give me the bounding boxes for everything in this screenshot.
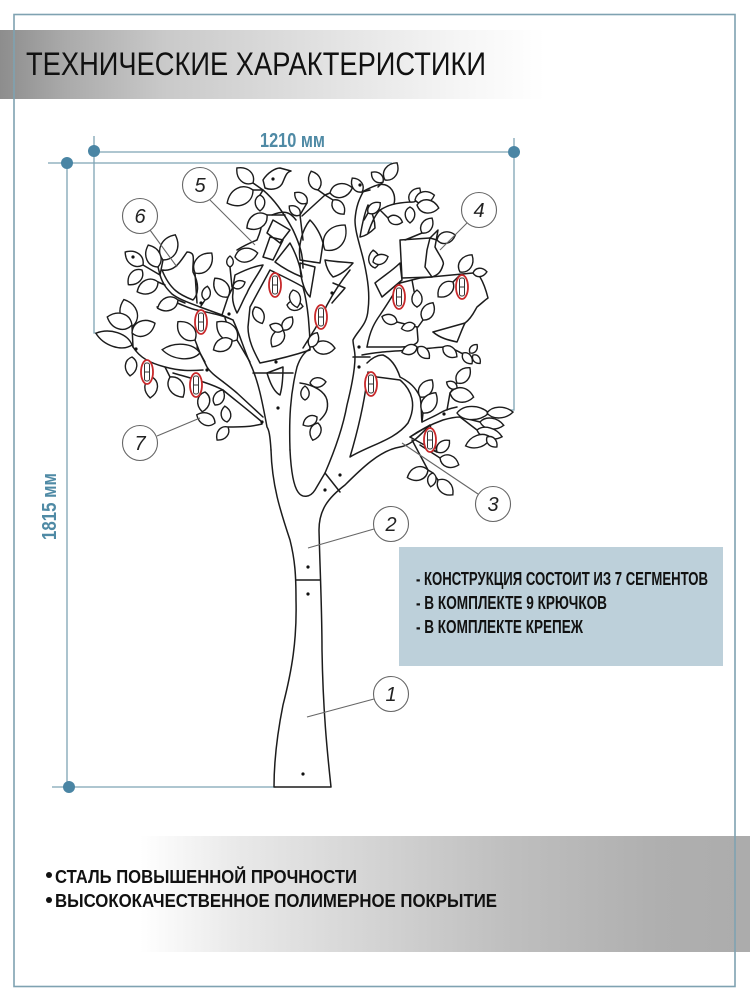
trunk	[222, 192, 430, 787]
callout 5	[182, 168, 255, 245]
feature list	[46, 866, 497, 911]
mounting dots	[131, 177, 446, 776]
hook 3	[195, 310, 207, 334]
callout 7	[122, 418, 200, 460]
callout 6: 6	[134, 206, 146, 228]
callout 3	[402, 443, 510, 522]
feature 2: ВЫСОКОКАЧЕСТВЕННОЕ ПОЛИМЕРНОЕ ПОКРЫТИЕ	[55, 891, 497, 911]
footer band	[140, 836, 750, 952]
callout 4: 4	[473, 200, 485, 222]
hook 7	[456, 275, 468, 299]
header band	[0, 30, 545, 99]
hook 4	[269, 273, 281, 297]
callout 5: 5	[194, 175, 206, 197]
hook 9	[424, 428, 436, 452]
info panel	[399, 547, 723, 666]
width label: 1210 мм	[260, 130, 325, 152]
hooks	[141, 273, 468, 452]
height label: 1815 мм	[39, 473, 61, 540]
feature 1: СТАЛЬ ПОВЫШЕННОЙ ПРОЧНОСТИ	[55, 866, 357, 887]
twigs	[132, 182, 490, 480]
hook 5	[315, 305, 327, 329]
callout 4	[440, 192, 496, 250]
hook 1	[141, 360, 153, 384]
dimension lines	[48, 136, 520, 793]
panel line 2: - В КОМПЛЕКТЕ 9 КРЮЧКОВ	[416, 593, 607, 613]
cut-out shapes	[162, 168, 443, 457]
callout 6	[122, 198, 177, 267]
hook 6	[393, 285, 405, 309]
hook 8	[365, 372, 377, 396]
callout 1	[307, 676, 408, 717]
callout 3: 3	[487, 494, 499, 516]
leaves	[94, 159, 513, 499]
callout 2	[308, 506, 408, 548]
callout 7: 7	[134, 433, 146, 455]
hook 2	[190, 373, 202, 397]
callout 1: 1	[385, 684, 397, 706]
title: ТЕХНИЧЕСКИЕ ХАРАКТЕРИСТИКИ	[26, 46, 486, 82]
callout 2: 2	[384, 514, 397, 536]
segment callouts	[122, 168, 510, 717]
branches	[133, 184, 488, 437]
tree drawing	[94, 159, 513, 787]
panel line 3: - В КОМПЛЕКТЕ КРЕПЕЖ	[416, 617, 584, 637]
